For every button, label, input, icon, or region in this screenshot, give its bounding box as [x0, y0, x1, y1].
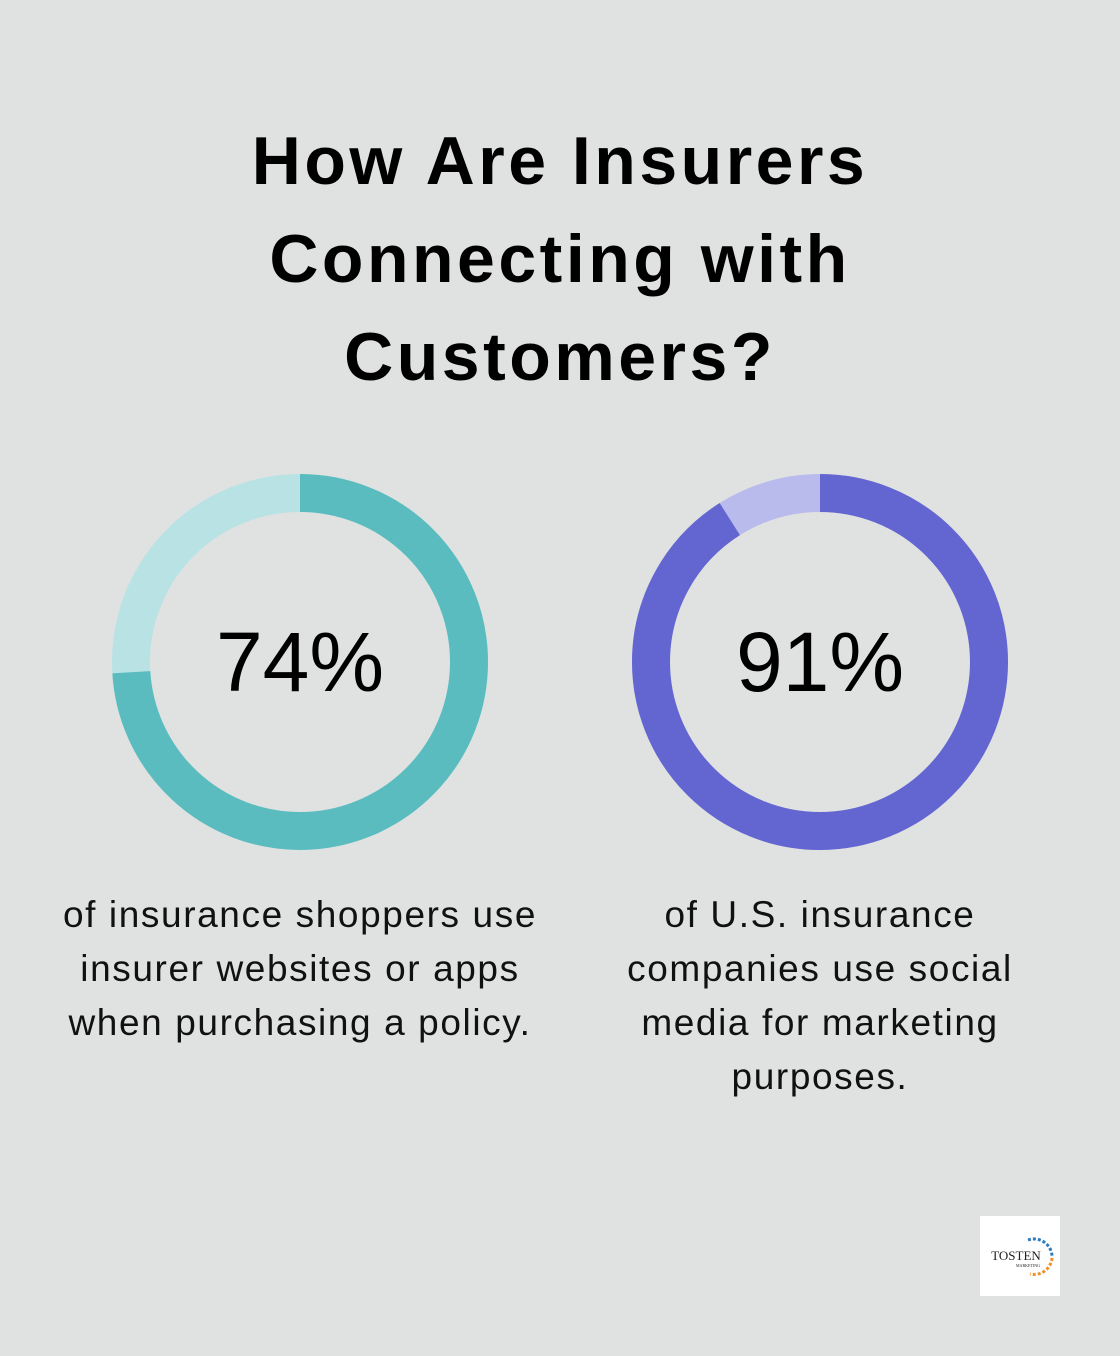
logo: TOSTEN	[991, 1248, 1041, 1263]
text: left description: when purchasing a policy.	[68, 1002, 532, 1043]
logo: MARKETING	[1016, 1263, 1040, 1268]
title: Customers?	[344, 319, 776, 395]
text: right description: media for marketing	[641, 1002, 999, 1043]
text: left description: of insurance shoppers use	[63, 894, 537, 935]
text: right description	[627, 894, 1013, 1097]
title	[252, 123, 868, 395]
donut: 74%: 74%	[216, 615, 384, 709]
text: right description: of U.S. insurance	[664, 894, 976, 935]
text: right description: purposes.	[732, 1056, 908, 1097]
text: left description: insurer websites or apps	[80, 948, 520, 989]
logo	[980, 1216, 1060, 1296]
donut: 91%: 91%	[736, 615, 904, 709]
text: left description	[63, 894, 537, 1043]
title: How Are Insurers	[252, 123, 868, 199]
donut: 74%	[112, 474, 488, 850]
donut: 91%	[632, 474, 1008, 850]
title: Connecting with	[269, 221, 851, 297]
text: right description: companies use social	[627, 948, 1013, 989]
